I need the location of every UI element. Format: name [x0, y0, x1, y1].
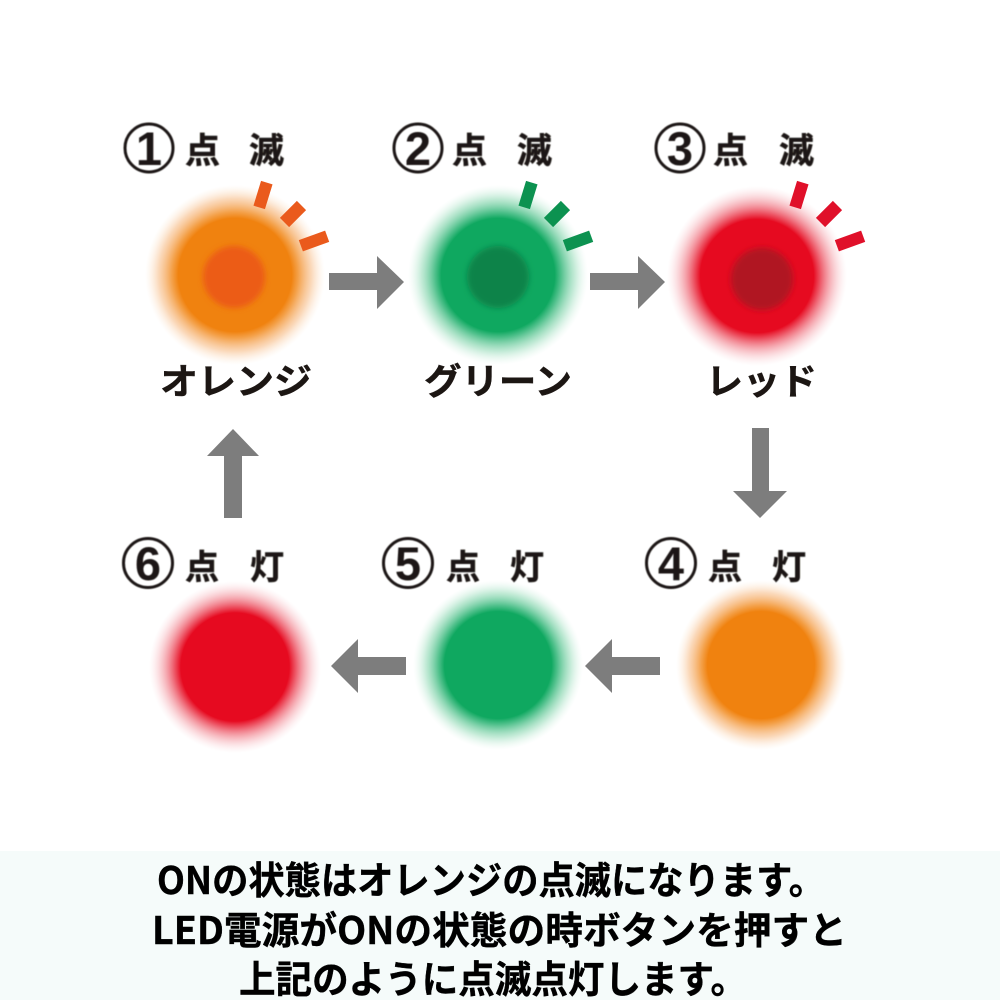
- step 3 label: 3: [667, 122, 693, 175]
- step 4 label: 4: [658, 537, 684, 590]
- step 3 label: 点: [713, 123, 748, 174]
- panel: caption band: [0, 851, 1000, 1000]
- arrow: 3 to 4: [733, 428, 787, 518]
- step 2 color name: グリーン: [424, 353, 572, 405]
- arrow: 2 to 3: [590, 256, 665, 309]
- step 6 label: 点: [185, 540, 219, 589]
- caption text: LED電源がONの状態の時ボタンを押すと: [152, 900, 847, 955]
- caption text: ONの状態はオレンジの点滅になります。: [157, 850, 825, 905]
- step 1 label: 点: [185, 123, 220, 174]
- caption text: [152, 850, 847, 1000]
- step 3 label: 滅: [779, 123, 814, 174]
- step 6 label: [124, 537, 284, 590]
- step 2 label: 点: [452, 123, 487, 174]
- step 3 lamp: red blinking: [667, 181, 865, 366]
- arrow: 1 to 2: [329, 256, 404, 309]
- step 1 label: [125, 122, 284, 175]
- step 2 label: [394, 122, 552, 175]
- step 4 label: 点: [708, 540, 742, 589]
- step 2 label: 2: [405, 122, 431, 175]
- step 5 label: [384, 537, 544, 590]
- step 5 label: 点: [446, 540, 480, 589]
- step 4 lamp: orange steady: [676, 580, 846, 750]
- step 3 color name: レッド: [706, 353, 817, 405]
- step 4 label: 灯: [772, 540, 806, 589]
- step 1 color name: オレンジ: [160, 353, 312, 405]
- step 1 lamp: orange blinking: [145, 181, 329, 365]
- arrow: 4 to 5: [585, 639, 660, 693]
- step 5 label: 5: [395, 537, 421, 590]
- step 3 label: [656, 122, 814, 175]
- step 2 label: 滅: [517, 123, 552, 174]
- step 4 label: [646, 537, 806, 590]
- step 5 lamp: green steady: [413, 580, 583, 750]
- step 2 lamp: green blinking: [408, 181, 593, 365]
- step 5 label: 灯: [510, 540, 544, 589]
- step 1 label: 滅: [249, 123, 284, 174]
- step 1 label: 1: [136, 122, 162, 175]
- step 6 label: 灯: [250, 540, 284, 589]
- step 6 lamp: red steady: [149, 581, 321, 753]
- arrow: 5 to 6: [331, 639, 406, 693]
- step 6 label: 6: [135, 537, 161, 590]
- arrow: 6 to 1: [207, 429, 259, 518]
